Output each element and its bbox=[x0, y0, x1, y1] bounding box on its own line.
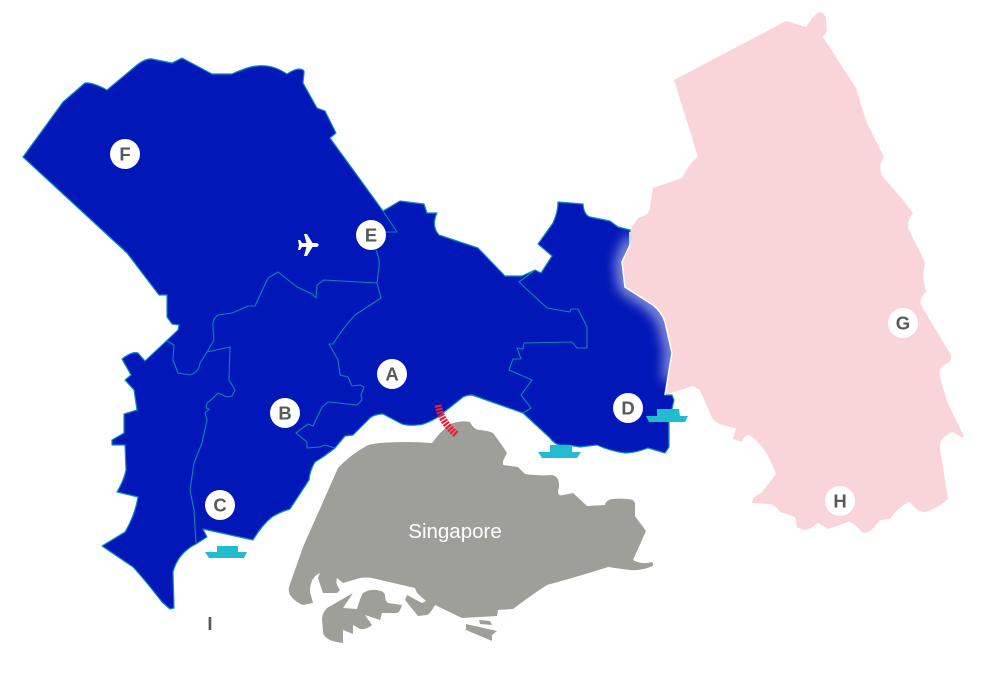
marker C bbox=[205, 490, 235, 520]
label: Singapore: Singapore bbox=[408, 520, 502, 543]
icon: ferry D bbox=[646, 409, 688, 422]
marker D bbox=[613, 393, 643, 423]
marker H bbox=[825, 486, 855, 516]
marker E bbox=[356, 220, 386, 250]
marker B bbox=[270, 398, 300, 428]
icon: ferry middle bbox=[538, 445, 581, 458]
marker G: G bbox=[896, 312, 910, 334]
marker A: A bbox=[385, 364, 399, 384]
marker F bbox=[110, 139, 140, 169]
icon: airplane bbox=[298, 234, 319, 256]
marker D: D bbox=[621, 398, 635, 418]
marker A bbox=[377, 359, 407, 389]
icon: ferry C bbox=[205, 546, 247, 558]
marker H: H bbox=[833, 490, 847, 512]
marker C: C bbox=[213, 494, 227, 516]
marker B: B bbox=[278, 402, 292, 424]
region: G and H (pink territory) bbox=[622, 12, 964, 533]
marker F: F bbox=[119, 144, 131, 164]
Singapore island bbox=[289, 421, 653, 643]
region: A to F (blue territory) bbox=[23, 58, 674, 609]
marker E: E bbox=[365, 224, 377, 246]
causeway bridge bbox=[438, 405, 457, 435]
boundary lines between regions bbox=[167, 211, 587, 543]
marker G bbox=[888, 308, 918, 338]
label I: I bbox=[207, 613, 213, 634]
